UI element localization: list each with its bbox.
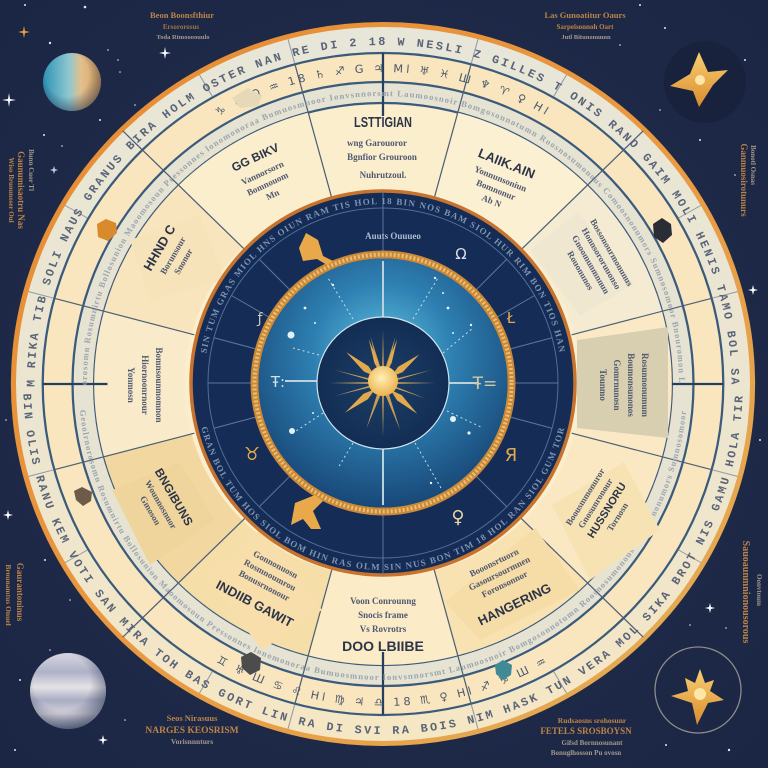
pale band labels: Geoolrnorosomn Rosumnirtu Bollosunion Maoomosoun Pressonnes lonomonoraa Bumuosmnoor Ionvsnnorsmt Laumoosnoir Bomgosonnotumn Roosnosumonous Comoosnonumors Sumnosomoor Bnouromon Lnumrmn [82, 90, 685, 385]
paper card: bottom left sector [205, 528, 322, 650]
sector text: bottom right: Foronsonnor [480, 569, 529, 600]
zodiac symbol: right axis: Ŧ= [472, 374, 497, 394]
constellation stars [288, 277, 472, 484]
sector text: top [347, 114, 417, 180]
zodiac ring text: SIN TUM GRAS MIOL HNS OIUN RAM TIS HOL 18 BIN NOS BAM SIOL HUR RIM BON TIOS HAN [200, 198, 565, 354]
sector text: right: Boumonsunonos [626, 353, 636, 417]
zodiac symbol: right upper: Ł [506, 309, 516, 327]
sector text: bottom left: Gonnonuosn [252, 548, 300, 580]
ring spokes [208, 191, 558, 575]
inner cream field [94, 103, 672, 665]
middle band symbols: ♊ ♅ Ш ♋ ♌ Hl ♍ ♃ ♎ 18 ♏ ♀ Hl ♐ ♑ Ш ♒ [217, 656, 546, 706]
sector tints [94, 104, 672, 665]
sector text: left: Bomnsounmomnon [154, 347, 164, 423]
corner text: top right: Las Gunoatitur Oaurs [544, 10, 626, 20]
zodiac symbol: upper right: Ω [455, 245, 467, 263]
sector text: left upper: Borunsour [158, 235, 188, 276]
corner text: top left: Beon Boonsfthiur [150, 10, 214, 20]
corner text: top left [150, 10, 214, 41]
sector text: right: Gomrnunosn [612, 359, 622, 411]
zodiac symbol: right lower: Я [505, 445, 517, 466]
sector text: upper right [462, 145, 537, 217]
corner text: bottom left: NARGES KEOSRISM [145, 726, 239, 736]
pale band labels: Geoolrnorosomn Rosumnirtu Bollosunion Maoomosoun Pressonnes lonomonoraa Bumuosmnoor Ionvsnnorsmt Laumoosnoir Bomgosonnotumn Roosnosumonous Comoosnonumors Sumnosomoor [80, 410, 686, 680]
corner text: right upper vertical: Bonotl Osnas [749, 145, 757, 185]
blue sky field [258, 258, 508, 508]
sector text: bottom right: HANGERING [475, 580, 553, 628]
pale band labels [80, 90, 686, 680]
corner text: top right: Sarpeisonnoh Oart [557, 23, 614, 31]
corner text: bottom right [540, 716, 632, 757]
sector text: right upper [557, 217, 635, 306]
inner dark zodiac disc [189, 189, 577, 577]
sector text: bottom right: Booonsrtuorn [468, 546, 520, 579]
sector text: bottom left: INDIIB GAWIT [214, 577, 296, 630]
zodiac symbol: bottom right: ♀ [451, 507, 465, 528]
sector text: upper right: Ab N [480, 193, 503, 210]
sector text: bottom: Snocis frame [358, 610, 408, 620]
thin sun rays [329, 330, 435, 437]
planet: blue and tan, top left [43, 53, 101, 111]
sector text: upper left [229, 140, 298, 210]
corner text: bottom right: Rudsaosns srohosunr [558, 716, 627, 725]
sector text: right lower: Gnosunronour [576, 476, 615, 530]
sector text: left lower: Gmoson [138, 494, 163, 527]
sector text: top: wng Garouoror [347, 138, 407, 148]
sector text: upper left: Bomnouom [245, 170, 290, 198]
large sun rays [343, 339, 421, 416]
sector text: right lower [564, 467, 639, 547]
corner text: top right [544, 10, 626, 41]
paper card: left upper sector [130, 215, 225, 300]
sector text: left [126, 347, 164, 423]
corner text: left upper vertical: Bunn Cuor Tl [27, 149, 35, 191]
sector text: bottom: Vs Rovrotrs [360, 624, 407, 634]
corner text: top left: Toda Rtmoooouulo [156, 34, 210, 41]
paper card: bottom right sector [445, 528, 580, 640]
sector text: bottom left [214, 540, 316, 630]
sector text: bottom [342, 596, 424, 654]
sector dividers [53, 63, 713, 705]
middle cream band [43, 53, 723, 715]
corner text: left lower vertical: Brounamtus Onuel [4, 564, 13, 626]
sector text: left lower: Wounnosnuor [143, 478, 179, 531]
inner core circle [317, 317, 449, 449]
gold ornamental ring [254, 254, 512, 512]
corner text: bottom right: Bonuglhosson Pu ovosn [551, 749, 621, 757]
sector text: right upper: Gnoomunmnnun [570, 233, 612, 296]
zodiac ring line [208, 208, 558, 558]
icon: gold star in dark circle, top right [664, 41, 746, 123]
paper card: lower left sector [112, 462, 215, 565]
middle band symbols: ♑ ♃ Ω ♒ 18 ♄ ♐ G ♃ Ml ♅ ♓ Ш ♆ ♈ ♀ Hl [215, 64, 549, 115]
sector text: bottom left: Bonusrnonour [237, 568, 291, 603]
constellations [293, 278, 483, 488]
sector text: upper right: LAIIK.AIN [476, 145, 537, 182]
corner text: bottom right: FETELS SROSBOYSN [540, 726, 632, 736]
corner text: left lower vertical [4, 563, 25, 626]
sector text: right: Rosunnonumum [640, 353, 650, 418]
sector text: top: Bgnfior Grouroon [347, 152, 417, 162]
paper card: lower right sector [552, 462, 660, 580]
corner text: left upper vertical: Gaunumisaotru Nas [16, 151, 26, 229]
outer band labels: HUNI QELI GAN BAUM RIKA TIB SOLI NAUS GRANUS BIRA HOLM OSTER NAN RE DI 2 18 W NESLI Z GILLES T ONIS RANO GAIM MOLI HENIS TAMO BOL SARUM VIN LINDA HOM [26, 37, 740, 386]
corner text: left lower vertical: Gaurantoninus [15, 563, 25, 622]
sector text: top: Nuhrutzoul. [360, 170, 406, 180]
planet: banded lilac, bottom left [30, 653, 106, 729]
corner text: right lower vertical [740, 541, 763, 643]
wheel ornaments: small blobs [74, 88, 672, 680]
zodiac symbol: left upper: ƒ [257, 311, 264, 327]
zodiac ring text [200, 198, 565, 570]
sector text: left: Yonmosn [126, 367, 136, 403]
corner text: right upper vertical: Ganmuosirotunurs [739, 143, 749, 217]
disc base [191, 191, 575, 575]
sector text: upper right: Yonnunsoniun [473, 164, 528, 194]
cardinal axis lines [43, 53, 723, 715]
sector text: right lower: Boousmmonuror [564, 467, 607, 527]
corner text: left upper vertical [7, 149, 35, 229]
corner text: top right: Jutl Bitunonunnn [561, 34, 611, 41]
corner text: left upper vertical: Wiso Bruounoser Oul [7, 157, 15, 223]
sector text: right: Tounmo [598, 369, 608, 401]
sector text: upper right: Bomnonur [475, 177, 517, 202]
sector text: left upper: Snonor [172, 247, 195, 276]
corner text: bottom left: Vorisnnnturs [171, 737, 213, 746]
sector text: left lower: BNGIBUNS [152, 466, 196, 528]
corner text: right lower vertical: Sauoaunmnionousorous [740, 541, 751, 643]
sector text: right lower: HUSSNORU [585, 481, 629, 541]
paper card: right sector [577, 327, 668, 438]
sun [368, 366, 398, 396]
zodiac ring text: GRAN BOL TUM HOS SIOL BOM HIN RAS OLM SIN NUS BON TIM 18 HOL RAN SIOL GUM TOR [202, 426, 564, 570]
sector text: left: Hiornoonrnour [140, 355, 150, 415]
corner text: bottom left [145, 713, 239, 746]
sector text: upper left: Mn [264, 187, 281, 202]
icon: gold figure, lower left [291, 495, 323, 529]
sector text: bottom: DOO LBIIBE [342, 638, 424, 654]
sky axes [285, 261, 479, 505]
ring caption: Auuts Ouuueo [365, 231, 421, 241]
corner text: right upper vertical [739, 143, 757, 217]
sector text: bottom right [456, 541, 553, 628]
corner text: top left: Ersororosus [163, 23, 199, 31]
corner text: bottom right: Gifsd Bornnosunant [562, 739, 623, 747]
middle band symbols [215, 64, 549, 706]
sector text: bottom left: Rosmnoumrou [242, 557, 298, 593]
sector text: left upper [140, 222, 201, 286]
inner pale label band [73, 82, 693, 686]
icon: gold lamp, upper left [299, 233, 333, 265]
sector text: upper left: GG BIKV [229, 140, 281, 175]
sector text: right lower: Tornosn [605, 501, 630, 533]
corner text: right lower vertical: Oonvtoum [755, 574, 763, 606]
paper card: upper right sector [530, 212, 634, 316]
sector text: right upper: Bossonourmonunus [588, 217, 635, 288]
sector text: right [598, 353, 650, 418]
corner text: bottom left: Seos Nirasuus [167, 713, 218, 723]
sector text: left lower [130, 466, 196, 541]
sector text: upper left: Vannorsorn [240, 159, 285, 187]
sector text: bottom right: Gasoursourmnen [467, 554, 532, 592]
sector text: bottom: Voon Conrounng [350, 596, 416, 606]
sector text: left upper: HHND C [140, 222, 179, 273]
sector text: top: LSTTIGIAN [354, 114, 412, 131]
icon: gold star in thin ring, bottom right [655, 647, 741, 733]
sector text: right upper: Honnsororuuonso [580, 226, 623, 291]
zodiac symbol: left axis: Ŧ: [270, 373, 285, 391]
outer band labels: NIL HOMA TARS BIN OLIS RANU KEM VOTI SAN MIRA TOH BAS GORT LIN RA DI SVI RA BOIS NIM HASK TUN VERA MOL SIKA BROT NIS GAMU HOLA TIR NEM SURO BIAN [23, 394, 742, 734]
zodiac symbol: left lower: ♉ [244, 444, 260, 465]
sector text: right upper: Rouonunos [565, 249, 596, 292]
